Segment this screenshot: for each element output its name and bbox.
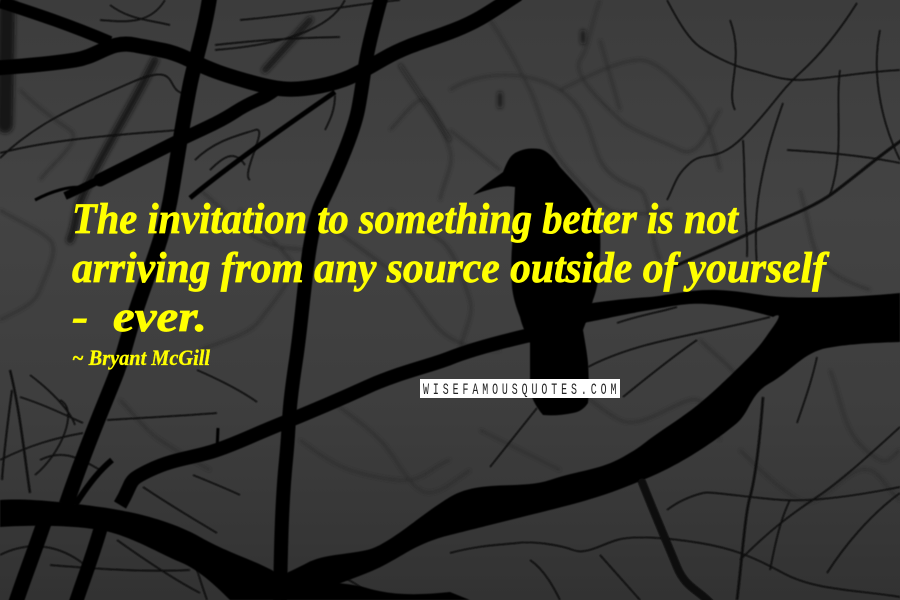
perch branch left bbox=[120, 335, 530, 505]
bottom-left thick branch bbox=[0, 500, 310, 600]
centre trunk bbox=[280, 0, 382, 600]
fork branch bbox=[642, 482, 712, 600]
quote line 2: arriving from any source outside of yourself bbox=[72, 245, 830, 292]
diagonal upper left bbox=[65, 145, 170, 196]
main upper-left branches and trunks bbox=[0, 0, 530, 600]
top-left band bbox=[0, 0, 518, 89]
watermark: WISEFAMOUSQUOTES.COM bbox=[423, 381, 616, 399]
icon: raven silhouette bbox=[473, 148, 600, 415]
quote line 1: The invitation to something better is not bbox=[72, 196, 740, 243]
left trunk bbox=[66, 0, 210, 505]
bottom dark band bbox=[240, 583, 470, 600]
quote text bbox=[72, 196, 830, 370]
long thin right twig bbox=[673, 138, 900, 267]
blurred mid-distance branches bbox=[5, 0, 583, 240]
attribution: ~ Bryant McGill bbox=[72, 345, 211, 370]
perch branch right and fork bbox=[240, 290, 900, 600]
thick lower branches bbox=[0, 290, 900, 600]
quote line 3: - ever. bbox=[72, 294, 207, 341]
